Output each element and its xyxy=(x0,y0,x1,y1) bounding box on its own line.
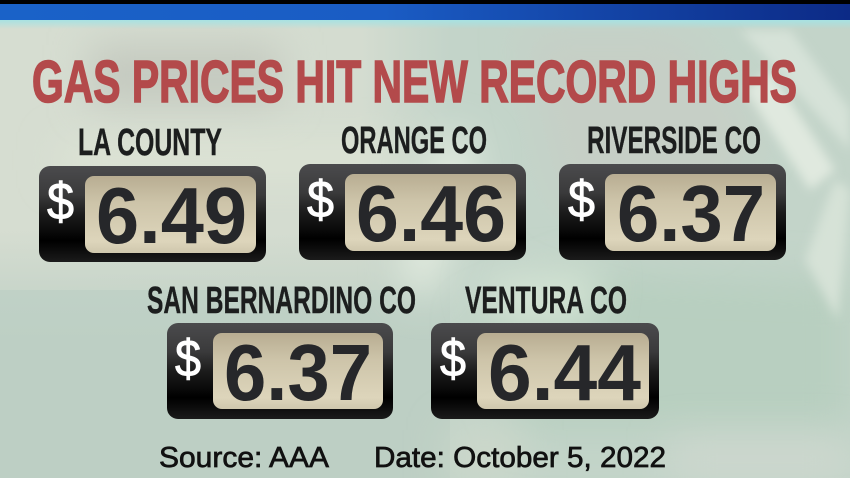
panel: San Bernardino County xyxy=(147,280,416,419)
label: San Bernardino Co: SAN BERNARDINO CO xyxy=(147,280,416,322)
price display: LA County: $ xyxy=(47,173,74,231)
price display: San Bernardino Co: 6.37 xyxy=(224,328,372,417)
source note: Source: AAA xyxy=(159,442,330,474)
price display: LA County: 6.49 xyxy=(96,171,247,260)
price display: Ventura Co: 6.44 xyxy=(488,328,641,417)
panel: LA County xyxy=(39,122,266,262)
price display: Ventura Co xyxy=(431,323,659,419)
panel: Riverside County xyxy=(559,120,786,260)
price display: LA County xyxy=(39,166,266,262)
price display: Orange Co: 6.46 xyxy=(356,169,506,258)
price display: San Bernardino Co: $ xyxy=(175,330,201,388)
price display: Riverside Co xyxy=(559,164,786,260)
label: Orange Co: ORANGE CO xyxy=(341,120,487,162)
panel: Orange County xyxy=(299,120,526,260)
price display: Orange Co xyxy=(299,164,526,260)
label: Ventura Co: VENTURA CO xyxy=(465,280,627,322)
price display: San Bernardino Co xyxy=(167,323,393,419)
price display: Riverside Co: 6.37 xyxy=(617,169,765,258)
price display: Orange Co: $ xyxy=(307,171,334,229)
price display: Ventura Co: $ xyxy=(440,330,466,388)
date note: Date: October 5, 2022 xyxy=(374,442,666,474)
price display: Riverside Co: $ xyxy=(568,171,595,229)
top broadcast bar xyxy=(0,0,850,29)
label: LA County: LA COUNTY xyxy=(78,122,222,164)
panel: Ventura County xyxy=(431,280,659,419)
